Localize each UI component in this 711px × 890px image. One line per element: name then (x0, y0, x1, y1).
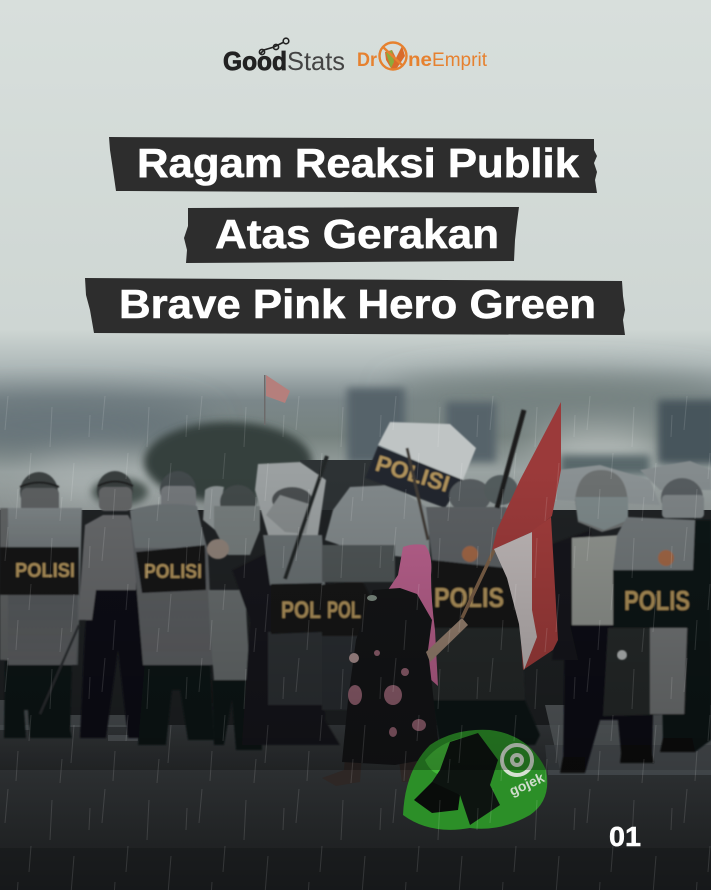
officer 5 dark body (232, 535, 340, 745)
officer 1 legs and boots (4, 660, 72, 738)
large glossy shield behind woman (325, 485, 430, 560)
woman in pink headscarf holding flag (322, 544, 468, 786)
scene shading (0, 470, 711, 770)
distant flag on pole (264, 375, 290, 425)
shield 6 lower band left of woman: POL (327, 597, 361, 624)
title band: Brave Pink Hero Green: Brave Pink Hero Green (119, 281, 596, 327)
officer 4 helmet and visor (203, 485, 260, 555)
officer 3 legs (138, 660, 214, 745)
right officer boots (560, 738, 695, 773)
distant helmets centre (449, 475, 518, 513)
wet road (0, 700, 711, 890)
right officer arms (548, 530, 600, 660)
officer 4 body and shield (208, 590, 250, 680)
gojek ring logo (502, 745, 532, 775)
GoodStats chart line icon (259, 38, 289, 55)
officer 2 trousers (80, 585, 150, 738)
distant sky clouds and fog (0, 375, 711, 500)
top tilted shield (255, 462, 326, 535)
shield 6 lower band left of woman (320, 545, 395, 710)
floral pattern (348, 595, 426, 737)
visor opening (414, 782, 460, 813)
right officer legs and boots (563, 620, 655, 773)
arm reaching to flag pole (426, 618, 468, 662)
officer 3 helmet (160, 471, 196, 510)
officer 3 shield: POLISI (144, 561, 202, 583)
officer 5 shield: POL (281, 597, 321, 624)
page number: 01 (609, 821, 641, 852)
Dr wordmark: Dr (357, 50, 378, 71)
tilted shield black band with POLISI: POLISI (373, 450, 453, 497)
right officer shield (603, 517, 695, 716)
right back shields (555, 461, 711, 505)
red and white flag (492, 402, 561, 670)
rain overlay (0, 390, 711, 890)
centre shield (426, 507, 525, 708)
title band: Atas Gerakan: Atas Gerakan (215, 211, 499, 257)
tilted shield top white (378, 422, 476, 480)
title band: Brave Pink Hero Green (85, 278, 625, 335)
Drone Emprit logo (357, 42, 488, 71)
baton across officer 5 (285, 456, 327, 579)
centre legs (432, 700, 540, 745)
distant trees (92, 422, 650, 506)
officer 4 raised hand (207, 539, 229, 559)
far right officer (660, 478, 711, 752)
dark mass behind the police line (0, 510, 711, 735)
ne wordmark: ne (408, 50, 432, 71)
flag pole (462, 546, 496, 618)
legs and feet (322, 755, 420, 786)
officer 2 shirt (78, 515, 136, 620)
line of riot police (0, 410, 711, 773)
Good wordmark: Good (223, 46, 287, 76)
right officer helmet (575, 470, 628, 532)
broken dark hole (430, 733, 500, 825)
gojek wordmark: gojek (507, 769, 547, 799)
right officer shield: POLIS (624, 585, 690, 616)
bright lens spot on shield (617, 650, 627, 660)
officer 1 shield: POLISI (15, 560, 75, 582)
officer 5 helmet visor (266, 487, 312, 534)
broken green gojek helmet (403, 730, 547, 830)
bird in no-drone ring icon (380, 42, 406, 70)
officer 5 shield (263, 535, 326, 705)
GoodStats logo (223, 38, 345, 76)
centre shield: POLIS (434, 582, 504, 613)
officer 2 helmet (97, 471, 133, 511)
officer 3 shield (130, 504, 213, 665)
thin baton near shield (407, 448, 428, 540)
Emprit wordmark: Emprit (432, 50, 488, 71)
pink headscarf (388, 544, 438, 686)
officer 1 shield (0, 508, 82, 665)
dark barrier behind the line (300, 460, 390, 510)
officer 2 baton (40, 625, 79, 714)
tilted shield black band with POLISI (365, 446, 463, 508)
title band: Atas Gerakan (184, 207, 519, 263)
title band: Ragam Reaksi Publik (109, 137, 597, 193)
officer 1 helmet (20, 472, 59, 514)
title band: Ragam Reaksi Publik: Ragam Reaksi Publik (137, 140, 579, 186)
distant buildings (347, 388, 711, 464)
Stats wordmark: Stats (287, 46, 345, 76)
floral dark dress (342, 588, 440, 765)
officer 4 legs (212, 680, 262, 750)
right officer vest (572, 535, 624, 625)
centre baton (497, 410, 524, 508)
